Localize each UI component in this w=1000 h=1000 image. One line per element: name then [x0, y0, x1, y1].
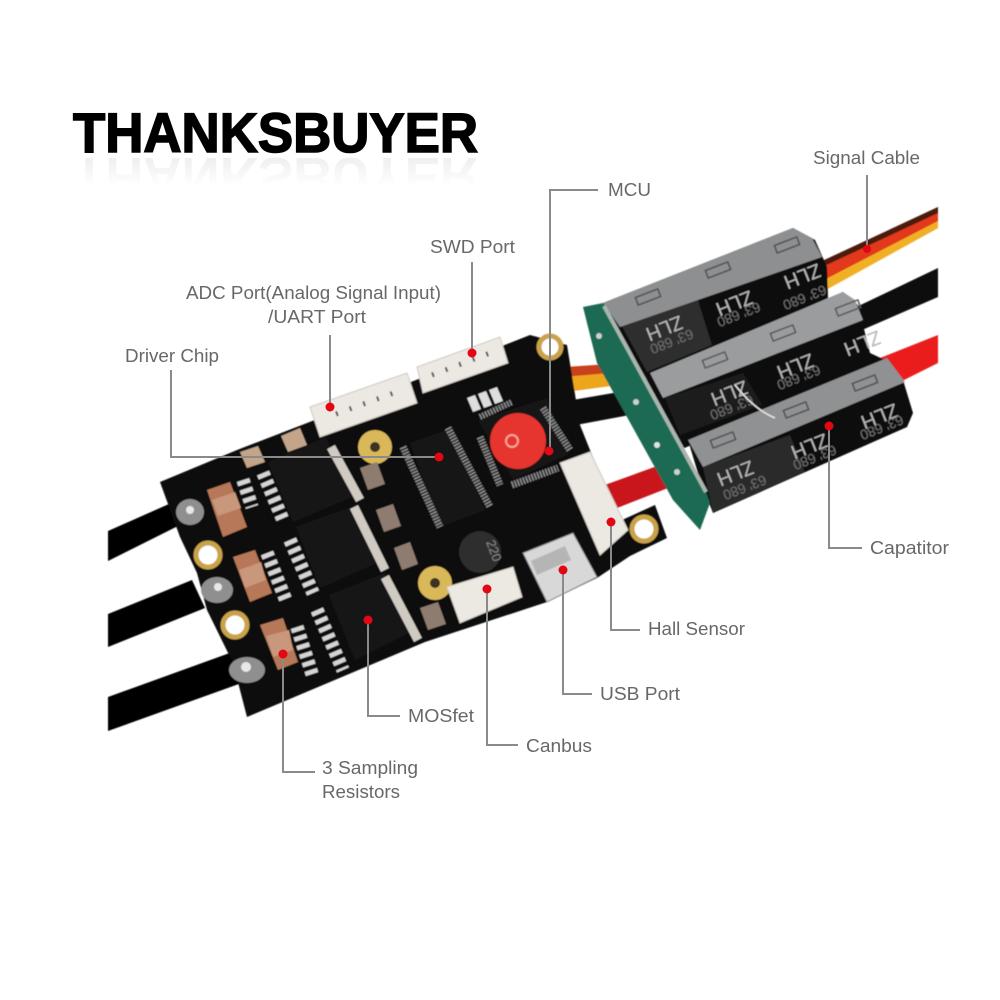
capacitor 1: 63' 680 [781, 282, 829, 314]
connector pins [336, 350, 498, 414]
callout: Capatitor [824, 422, 949, 558]
capacitor 3: 63' 680 [721, 472, 769, 504]
capacitor 3: 63' 680 [791, 442, 839, 474]
title: THANKSBUYER logo: THANKSBUYER [73, 146, 478, 209]
callout: Signal Cable [813, 148, 920, 253]
callout: Driver Chip: Driver Chip [125, 346, 219, 366]
capacitor 1: ZLH [781, 258, 824, 293]
title: THANKSBUYER logo [73, 101, 478, 209]
gold gears [358, 430, 452, 600]
callout: MCU [544, 180, 651, 456]
callout: Hall Sensor: Hall Sensor [648, 619, 745, 639]
driver chip [403, 428, 490, 527]
capacitor 3: ZLH [714, 455, 757, 490]
MOSFET packages [268, 437, 411, 660]
inductor [459, 531, 505, 573]
callout: 3 Sampling Resistors: Resistors [322, 782, 400, 802]
capacitor 2: 63' 680 [708, 392, 756, 424]
main PCB [160, 335, 667, 717]
callout: SWD Port: SWD Port [430, 237, 515, 257]
resistors [207, 428, 307, 670]
capacitor 2 [645, 292, 885, 450]
capacitor 2: 63' 680 [775, 362, 823, 394]
callout: ADC Port / UART Port: ADC Port(Analog Signal Input) [186, 283, 441, 303]
capacitor 3: ZLH [858, 398, 901, 433]
white strips by MOSFETs [331, 447, 418, 640]
motor wires on the left [108, 500, 250, 731]
callout: ADC Port / UART Port [186, 283, 441, 412]
capacitor 1: ZLH [643, 310, 686, 345]
inductor: 220 [483, 538, 505, 563]
capacitor 2: ZLH [774, 348, 817, 383]
callout: Capatitor: Capatitor [870, 538, 949, 558]
capacitor 3: 63' 680 [858, 412, 906, 444]
wires behind the capacitors [550, 207, 938, 510]
product photo: ESC board with capacitors [108, 207, 938, 731]
title: THANKSBUYER logo: THANKSBUYER [73, 101, 478, 164]
callout: 3 Sampling Resistors: 3 Sampling [322, 758, 418, 778]
callout: Canbus [482, 584, 592, 756]
callout: Driver Chip [125, 346, 444, 462]
mounting holes [196, 336, 656, 637]
capacitor 1 [603, 228, 829, 380]
capacitor 3 [688, 358, 913, 513]
gate pads [243, 473, 343, 677]
capacitor 3: ZLH [788, 428, 831, 463]
callout: USB Port [558, 566, 680, 704]
capacitor 2: ZLH [708, 375, 751, 410]
callout: MOSfet: MOSfet [408, 706, 474, 726]
capacitor 1: ZLH [713, 285, 756, 320]
callout: SWD Port [430, 237, 515, 358]
capacitor 2: ZLH [841, 325, 884, 360]
callout: ADC Port / UART Port: /UART Port [268, 307, 366, 327]
solder blobs [176, 499, 265, 683]
callout: Hall Sensor [606, 518, 745, 639]
green capacitor PCB [583, 303, 710, 530]
MCU chip [478, 398, 570, 485]
capacitor 1: 63' 680 [648, 326, 696, 358]
USB port [523, 533, 597, 602]
small pads [360, 462, 446, 630]
callout: USB Port: USB Port [600, 684, 680, 704]
bright pads near MCU [467, 387, 503, 412]
callout: MCU: MCU [608, 180, 651, 200]
capacitor 1: 63' 680 [715, 299, 763, 331]
callout: Canbus: Canbus [526, 736, 592, 756]
callout: MOSfet [364, 616, 474, 726]
white connectors [310, 337, 628, 623]
callout: Signal Cable: Signal Cable [813, 148, 920, 168]
callout: 3 Sampling Resistors [278, 650, 418, 802]
